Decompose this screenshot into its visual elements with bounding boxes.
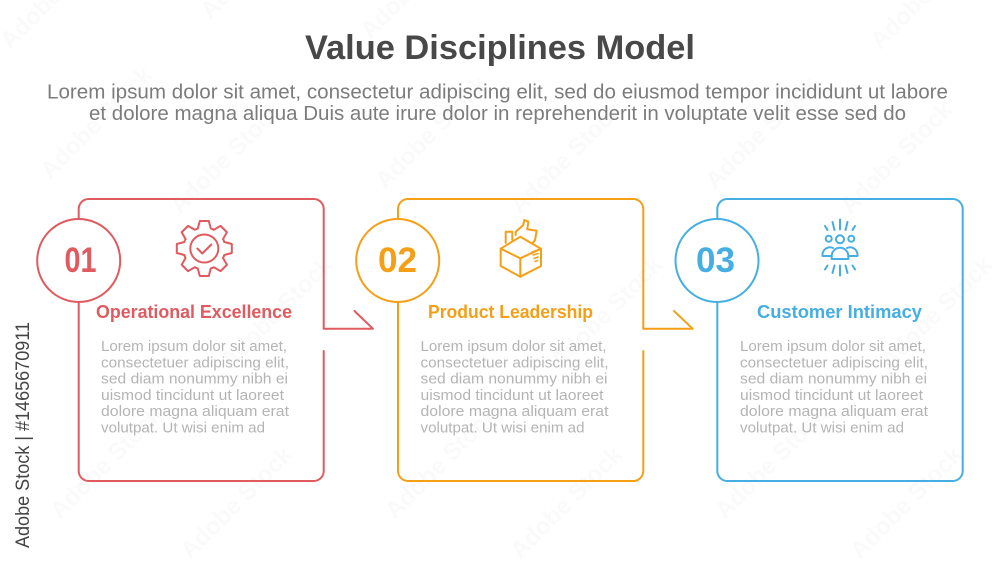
box outline with arrow [79,199,373,481]
heading: product leadership: Product Leadership [428,302,593,322]
background watermark: Adobe Stock [370,71,493,194]
body text: sed diam nonummy nibh ei [420,371,608,388]
title: Value Disciplines Model [305,29,695,67]
body text: volutpat. Ut wisi enim ad [101,420,265,436]
icon: box with thumbs up [501,220,541,277]
background watermark: Adobe Stock [835,96,958,219]
body text: Lorem ipsum dolor sit amet, [101,338,287,355]
body text: sed diam nonummy nibh ei [740,371,927,388]
box outline with arrow [398,199,693,481]
body text: Lorem ipsum dolor sit amet, [740,338,926,355]
icon: gear with check [177,221,232,276]
panel: customer intimacy [676,199,963,481]
body text [101,338,290,436]
body text: sed diam nonummy nibh ei [101,371,288,388]
body text: consectetuer adipiscing elit, [420,354,608,371]
body text: uismod tincidunt ut laoreet [420,387,604,404]
background watermark: Adobe Stock [380,401,503,524]
icon: group of people with rays [822,220,858,276]
body text [420,338,609,436]
body text: dolore magna aliquam erat [101,403,290,420]
background watermark: Adobe Stock [215,251,338,374]
background watermark: Adobe Stock [875,251,998,374]
background watermark: Adobe Stock [45,401,168,524]
body text: consectetuer adipiscing elit, [101,354,289,371]
body text: volutpat. Ut wisi enim ad [740,420,904,436]
body text: uismod tincidunt ut laoreet [101,387,285,404]
number badge 02 [356,219,439,302]
background watermark: Adobe Stock [35,61,158,184]
number badge 01 [37,219,120,302]
heading: customer intimacy: Customer Intimacy [757,302,922,322]
heading: operational excellence: Operational Excellence [96,302,292,322]
number badge 01: 01 [64,241,96,280]
background watermark: Adobe Stock [505,96,628,219]
stock credit: Adobe Stock | #1465670911 [13,322,34,548]
background watermark: Adobe Stock [505,441,628,563]
background watermark: Adobe Stock [165,96,288,219]
subtitle text [47,82,948,125]
panel: operational excellence [37,199,373,481]
body text: dolore magna aliquam erat [420,403,609,420]
subtitle text: Lorem ipsum dolor sit amet, consectetur adipiscing elit, sed do eiusmod tempor incididunt ut labore [47,82,948,104]
body text: volutpat. Ut wisi enim ad [420,420,584,436]
background watermark: Adobe Stock [710,401,833,524]
body text: uismod tincidunt ut laoreet [740,387,924,404]
number badge 02: 02 [378,241,417,280]
background watermark: Adobe Stock [545,251,668,374]
background watermark: Adobe Stock [700,71,823,194]
body text: Lorem ipsum dolor sit amet, [420,338,606,355]
box outline [717,199,963,481]
panel: product leadership [356,199,693,481]
background watermark: Adobe Stock [175,441,298,563]
body text [740,338,929,436]
body text: consectetuer adipiscing elit, [740,354,928,371]
number badge 03 [676,219,758,302]
number badge 03: 03 [696,241,735,280]
body text: dolore magna aliquam erat [740,403,929,420]
background watermark: Adobe Stock [845,441,968,563]
subtitle text: et dolore magna aliqua Duis aute irure dolor in reprehenderit in voluptate velit esse sed do [89,103,906,125]
